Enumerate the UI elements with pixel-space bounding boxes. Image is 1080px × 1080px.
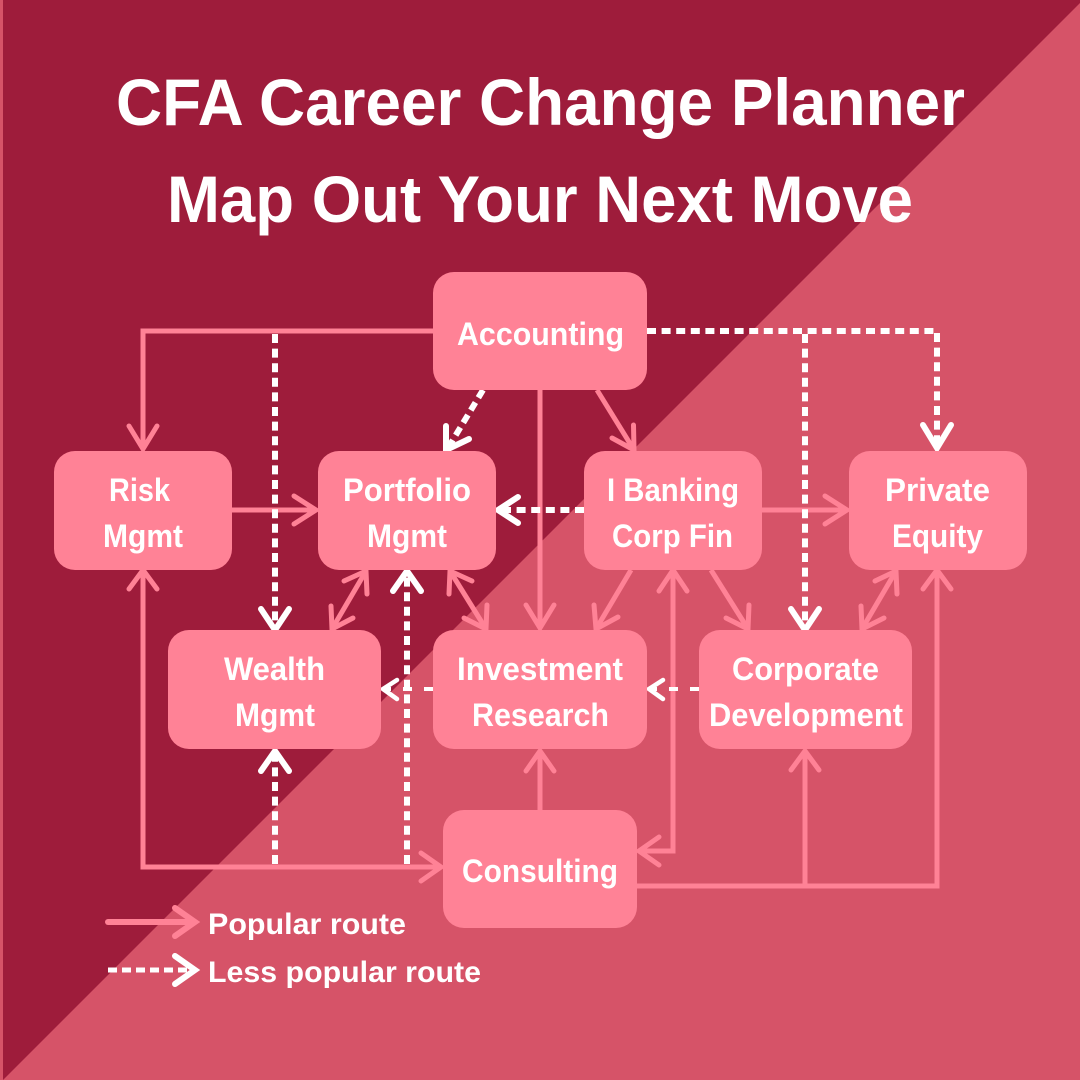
box: consulting xyxy=(443,810,637,928)
box: accounting xyxy=(433,272,647,390)
box: consulting: Consulting xyxy=(462,853,618,889)
dotted arrow: consulting to wealth mgmt xyxy=(261,751,289,864)
arrow: risk to portfolio xyxy=(232,496,316,524)
arrow: private equity and corporate development two-way xyxy=(861,571,897,629)
box: wealth mgmt: Wealth xyxy=(224,651,325,687)
box: private equity: Private xyxy=(885,472,990,508)
dotted arrow: accounting to private equity xyxy=(647,331,951,448)
box: risk mgmt: Risk xyxy=(109,472,170,508)
box: private equity xyxy=(849,451,1027,570)
box: wealth mgmt: Mgmt xyxy=(235,697,315,733)
legend: popular route: Popular route xyxy=(208,908,406,941)
box: portfolio mgmt: Portfolio xyxy=(343,472,471,508)
arrow: consulting to investment research xyxy=(526,751,554,810)
arrow: i banking and consulting two-way xyxy=(639,570,687,865)
arrow: i banking to investment research xyxy=(594,570,631,629)
box: i banking corp fin: Corp Fin xyxy=(612,518,733,554)
box: investment research: Research xyxy=(472,697,609,733)
box: i banking corp fin: I Banking xyxy=(607,472,739,508)
box: investment research xyxy=(433,630,647,749)
arrow: accounting to investment research xyxy=(526,390,554,628)
dotted arrow: consulting to portfolio xyxy=(393,571,421,864)
dashed arrow: accounting to portfolio xyxy=(446,390,483,450)
arrow: accounting to i banking xyxy=(597,390,634,450)
arrow: accounting to risk mgmt xyxy=(129,331,433,449)
arrow: portfolio and investment research two-way xyxy=(449,571,487,629)
box: risk mgmt: Mgmt xyxy=(103,518,183,554)
dashed arrow: i banking to portfolio xyxy=(498,497,584,523)
title: CFA Career Change Planner xyxy=(116,65,965,139)
arrow: i banking to private equity xyxy=(762,496,847,524)
dashed arrow: investment research to wealth mgmt xyxy=(383,680,433,699)
box: i banking corp fin xyxy=(584,451,762,570)
box: accounting: Accounting xyxy=(457,316,624,352)
dotted arrow: accounting to wealth mgmt xyxy=(261,334,289,630)
box: corporate development xyxy=(699,630,912,749)
box: corporate development: Development xyxy=(709,697,903,733)
dashed arrow: corporate development to investment research xyxy=(649,680,699,699)
box: wealth mgmt xyxy=(168,630,381,749)
box: portfolio mgmt xyxy=(318,451,496,570)
legend xyxy=(108,908,481,989)
legend: popular route xyxy=(108,908,406,941)
box: investment research: Investment xyxy=(457,651,623,687)
dotted arrow: accounting to corporate development xyxy=(791,334,819,630)
arrow: risk and consulting two-way xyxy=(129,570,441,881)
arrow: i banking to corporate development xyxy=(711,570,749,629)
arrow: consulting to corporate development and private equity xyxy=(637,570,951,886)
box: portfolio mgmt: Mgmt xyxy=(367,518,447,554)
title: Map Out Your Next Move xyxy=(167,162,913,236)
legend: less popular route: Less popular route xyxy=(208,956,481,989)
box: corporate development: Corporate xyxy=(732,651,879,687)
box: risk mgmt xyxy=(54,451,232,570)
arrow: portfolio and wealth two-way xyxy=(331,571,367,629)
box: private equity: Equity xyxy=(892,518,983,554)
title xyxy=(116,65,965,236)
